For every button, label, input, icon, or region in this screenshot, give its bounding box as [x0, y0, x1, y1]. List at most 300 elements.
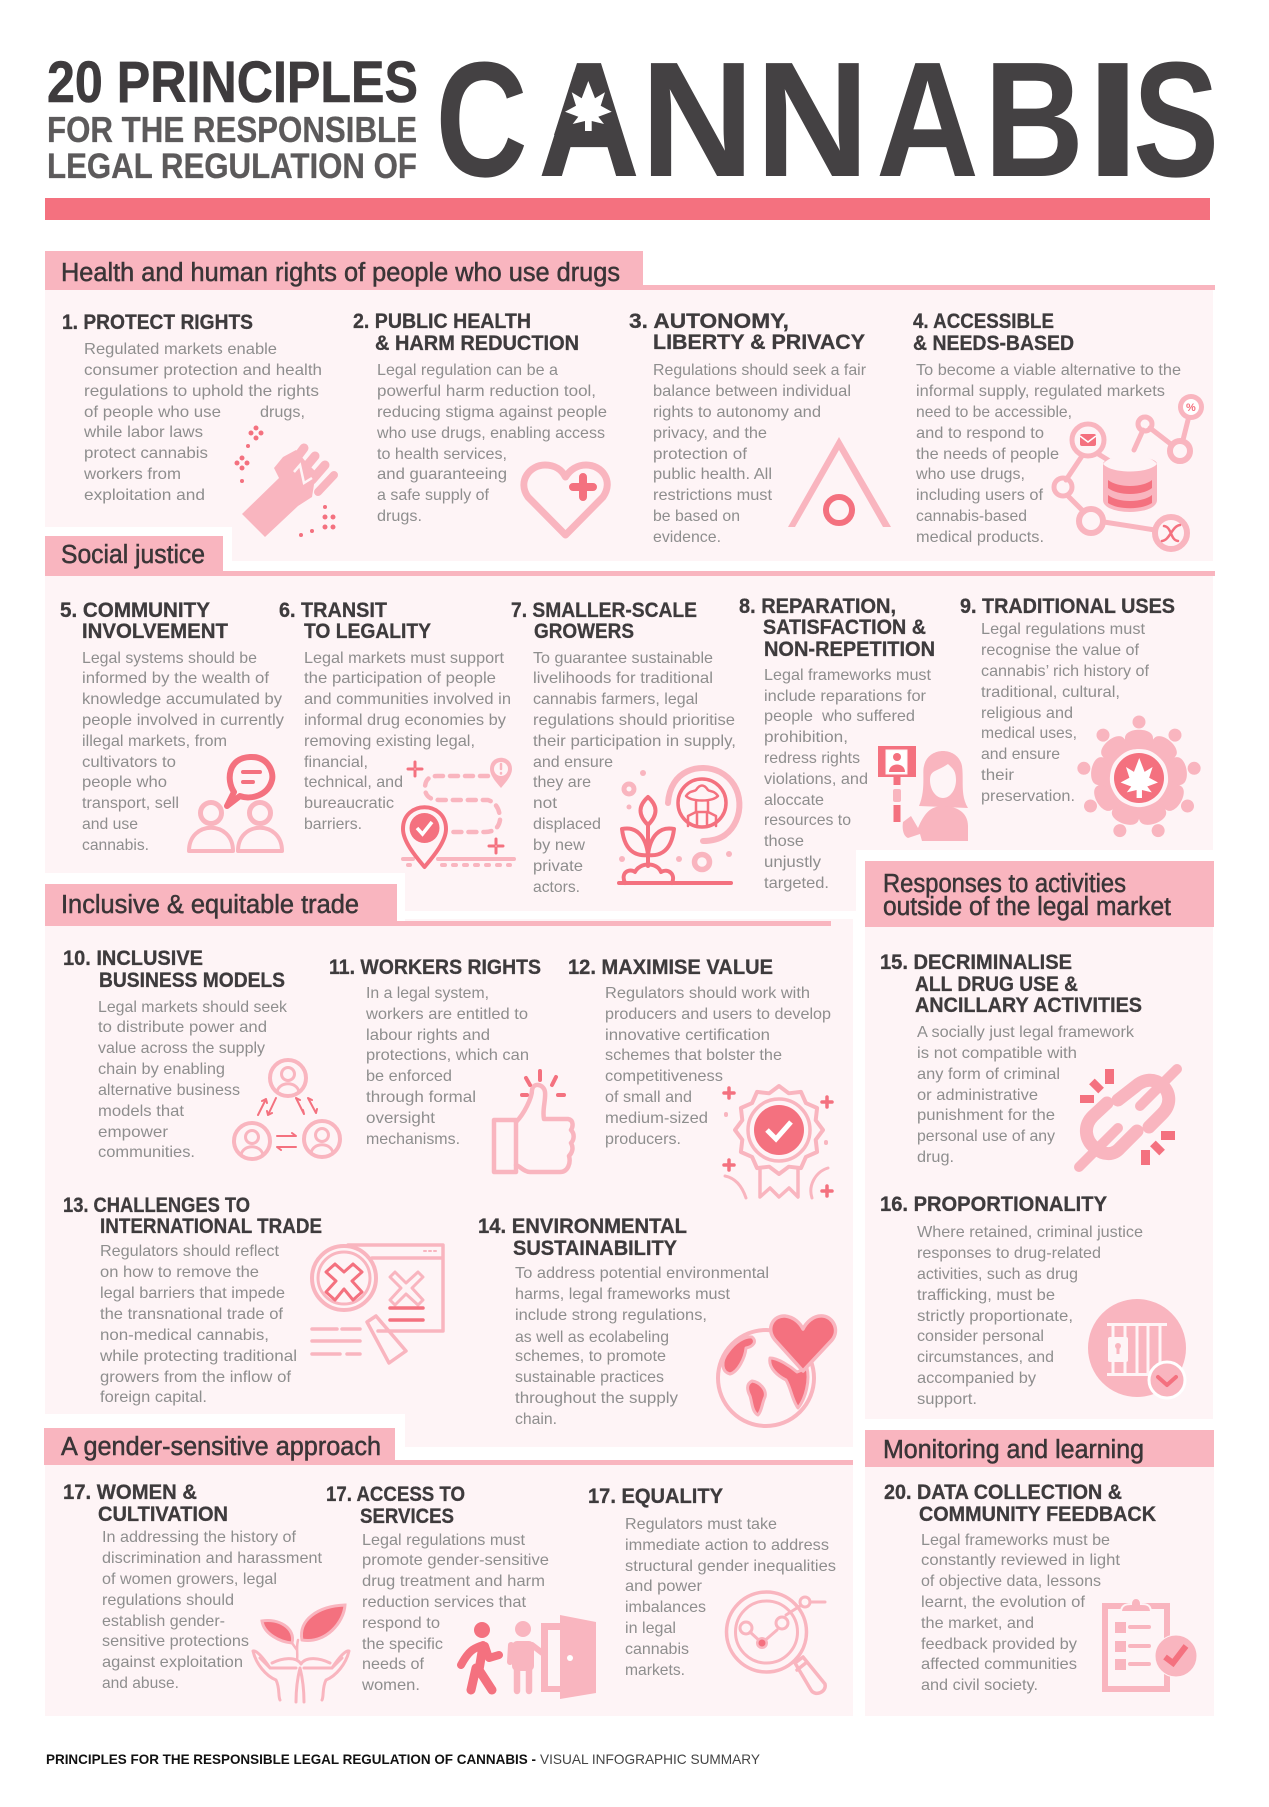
body text — [915, 362, 1181, 546]
body text: drugs. — [377, 508, 422, 525]
body text: markets. — [625, 1662, 685, 1679]
body text: Legal frameworks must — [764, 667, 932, 684]
principle 4: accessible and needs-based — [913, 310, 1204, 549]
body text: actors. — [533, 879, 580, 896]
body text: imbalances — [625, 1599, 706, 1616]
body text: and ensure — [533, 754, 613, 771]
body text: establish gender- — [102, 1613, 225, 1630]
body text: To guarantee sustainable — [533, 650, 713, 667]
body text: unjustly — [764, 854, 821, 871]
body text: alternative business — [98, 1082, 240, 1099]
title underline bar — [45, 198, 1210, 220]
body text: privacy, and the — [653, 425, 767, 442]
heading — [63, 947, 285, 992]
icon: clipboard with check — [1102, 1598, 1197, 1692]
body text: Regulated markets enable — [84, 341, 277, 358]
heading: 12. MAXIMISE VALUE — [568, 956, 773, 979]
icon: thumbs up — [494, 1071, 574, 1172]
body text: of objective data, lessons — [921, 1573, 1101, 1590]
section heading: monitoring and learning: Monitoring and learning — [883, 1436, 1144, 1464]
body text — [365, 985, 529, 1148]
heading: SATISFACTION & — [763, 616, 926, 639]
heading: SUSTAINABILITY — [513, 1237, 677, 1260]
body text: workers from — [83, 466, 181, 483]
body text: activities, such as drug — [917, 1266, 1078, 1283]
body text — [99, 1243, 297, 1406]
body text: A socially just legal framework — [917, 1024, 1135, 1041]
body text: and power — [625, 1578, 703, 1595]
body text: traditional, cultural, — [981, 684, 1120, 701]
title: cannabis: A — [876, 28, 979, 211]
body text: who use drugs, — [915, 466, 1025, 483]
body text: cannabis — [625, 1641, 689, 1658]
heading: & NEEDS-BASED — [913, 332, 1074, 355]
icon: three people exchanging — [234, 1060, 340, 1159]
title: cannabis: I — [1085, 28, 1141, 211]
heading: 9. TRADITIONAL USES — [960, 595, 1175, 618]
body text: Regulations should seek a fair — [653, 362, 867, 379]
title: cannabis: N — [755, 28, 869, 211]
body text: innovative certification — [605, 1027, 770, 1044]
body text: public health. All — [653, 466, 772, 483]
body text: while labor laws — [83, 424, 203, 441]
principle 5: community involvement — [60, 599, 284, 854]
body text: people who suffered — [764, 708, 915, 725]
body text: rights to autonomy and — [653, 404, 821, 421]
heading: 8. REPARATION, — [739, 595, 896, 618]
body text: removing existing legal, — [304, 733, 475, 750]
heading — [880, 951, 1142, 1017]
body text: powerful harm reduction tool, — [377, 383, 596, 400]
body text: Regulators should work with — [605, 985, 810, 1002]
body text: and abuse. — [102, 1675, 179, 1692]
icon: hands holding a sprout — [253, 1605, 349, 1702]
heading: CULTIVATION — [98, 1503, 228, 1526]
body text: Legal regulations must — [981, 621, 1146, 638]
body text: In addressing the history of — [102, 1529, 297, 1546]
body text: those — [764, 833, 804, 850]
body text: religious and — [981, 705, 1073, 722]
body text: protect cannabis — [84, 445, 208, 462]
icon: globe with heart — [718, 1316, 835, 1426]
body text: and use — [82, 816, 138, 833]
title: cannabis: B — [984, 28, 1084, 211]
body text: drug. — [917, 1149, 954, 1166]
panel: health and human rights — [45, 251, 1215, 561]
body text — [83, 341, 322, 504]
principle 9: traditional uses — [960, 595, 1203, 842]
body text: transport, sell — [82, 795, 179, 812]
body text: financial, — [304, 754, 368, 771]
body text: exploitation and — [84, 487, 205, 504]
body text: consumer protection and health — [84, 362, 322, 379]
heading: 14. ENVIRONMENTAL — [478, 1215, 687, 1238]
body text: cannabis-based — [916, 508, 1027, 525]
principle 7: smaller-scale growers — [511, 599, 739, 896]
heading: INTERNATIONAL TRADE — [100, 1215, 322, 1238]
principle 20: data collection and community feedback — [884, 1481, 1197, 1694]
body text: barriers. — [304, 816, 362, 833]
heading — [478, 1215, 687, 1260]
section heading: social justice: Social justice — [61, 541, 205, 569]
body text: on how to remove the — [100, 1264, 259, 1281]
body text: need to be accessible, — [916, 404, 1072, 421]
body text: people involved in currently — [82, 712, 284, 729]
icon: raised fist — [234, 426, 336, 537]
heading: 16. PROPORTIONALITY — [880, 1193, 1107, 1216]
body text: against exploitation — [102, 1654, 243, 1671]
heading: 15. DECRIMINALISE — [880, 951, 1072, 974]
heading: 11. WORKERS RIGHTS — [329, 956, 541, 979]
principle 19: equality — [588, 1485, 836, 1693]
body text — [376, 362, 607, 525]
heading — [913, 310, 1074, 355]
icon: triangle with ring — [788, 437, 891, 527]
body text: respond to — [362, 1615, 440, 1632]
body text: producers and users to develop — [605, 1006, 831, 1023]
body text — [102, 1529, 323, 1692]
section heading: monitoring and learning — [865, 1430, 1214, 1467]
body text: drug treatment and harm — [362, 1573, 545, 1590]
icon: heart with cross — [524, 465, 607, 535]
section heading: gender-sensitive approach: A gender-sensitive approach — [61, 1433, 381, 1461]
body text: livelihoods for traditional — [533, 670, 713, 687]
heading — [884, 1481, 1156, 1526]
title: 20 principles: 20 PRINCIPLES — [47, 50, 418, 115]
body text: To become a viable alternative to the — [916, 362, 1181, 379]
panel: responses to activities outside the legal market — [865, 861, 1214, 1419]
body text: throughout the supply — [515, 1390, 678, 1407]
section heading: inclusive and equitable trade — [45, 884, 831, 926]
body text: needs of — [362, 1656, 425, 1673]
body text: learnt, the evolution of — [921, 1594, 1086, 1611]
principle 8: reparation, satisfaction and non-repetition — [739, 595, 968, 892]
body text: and ensure — [981, 746, 1060, 763]
body text: and guaranteeing — [377, 466, 507, 483]
body text: chain. — [515, 1411, 557, 1428]
heading: 2. PUBLIC HEALTH — [353, 310, 531, 333]
body text: cannabis. — [82, 837, 149, 854]
body text: structural gender inequalities — [625, 1558, 836, 1575]
body text: the participation of people — [304, 670, 496, 687]
body text — [764, 667, 932, 892]
body text — [82, 650, 284, 854]
body text: constantly reviewed in light — [921, 1552, 1121, 1569]
body text: protection of — [653, 446, 748, 463]
body text: informal drug economies by — [304, 712, 506, 729]
principle 12: maximise value — [568, 956, 832, 1198]
body text — [917, 1224, 1143, 1408]
body text: regulations should — [102, 1592, 234, 1609]
heading: 13. CHALLENGES TO — [63, 1194, 250, 1217]
body text: non-medical cannabis, — [100, 1327, 269, 1344]
body text — [917, 1024, 1135, 1166]
body text: strictly proportionate, — [917, 1308, 1073, 1325]
body text: is not compatible with — [917, 1045, 1077, 1062]
body text: schemes that bolster the — [605, 1047, 782, 1064]
body text: balance between individual — [653, 383, 851, 400]
body text — [981, 621, 1150, 805]
body text: sustainable practices — [515, 1369, 664, 1386]
heading: COMMUNITY FEEDBACK — [919, 1503, 1156, 1526]
body text: illegal markets, from — [82, 733, 227, 750]
body text: redress rights — [764, 750, 860, 767]
section heading: social justice — [45, 536, 1215, 576]
icon: magnifier over a window with crosses — [312, 1245, 443, 1363]
body text: knowledge accumulated by — [82, 691, 282, 708]
body text: of small and — [605, 1089, 692, 1106]
body text: evidence. — [653, 529, 721, 546]
body text: circumstances, and — [917, 1349, 1054, 1366]
icon: cannabis leaf inside the letter A — [554, 72, 622, 135]
section heading: responses — [865, 861, 1214, 927]
heading: 4. ACCESSIBLE — [913, 310, 1054, 333]
body text: sensitive protections — [102, 1633, 249, 1650]
title: cannabis: A — [538, 28, 640, 211]
body text: while protecting traditional — [99, 1348, 297, 1365]
body text: oversight — [366, 1110, 436, 1127]
body text: informal supply, regulated markets — [916, 383, 1165, 400]
body text: Legal markets should seek — [98, 999, 288, 1016]
icon: community circle around a leaf — [1075, 716, 1203, 842]
principle 1: protect rights — [62, 311, 336, 537]
body text: producers. — [605, 1131, 681, 1148]
body text: they are — [533, 774, 591, 791]
body text: include reparations for — [764, 688, 927, 705]
heading: 10. INCLUSIVE — [63, 947, 203, 970]
heading: 17. EQUALITY — [588, 1485, 723, 1508]
body text: regulations should prioritise — [533, 712, 735, 729]
icon: broken chain — [1079, 1069, 1177, 1167]
heading: LIBERTY & PRIVACY — [653, 331, 865, 354]
heading — [511, 599, 697, 643]
body text: communities. — [98, 1144, 195, 1161]
body text: and communities involved in — [304, 691, 511, 708]
icon: data network: % — [1186, 402, 1196, 414]
footer caption: VISUAL INFOGRAPHIC SUMMARY — [540, 1751, 761, 1767]
body text: value across the supply — [98, 1040, 265, 1057]
principle 17: women and cultivation — [63, 1481, 349, 1702]
heading — [353, 310, 579, 355]
body text: discrimination and harassment — [102, 1550, 323, 1567]
principle 2: public health and harm reduction — [353, 310, 607, 535]
body text: as well as ecolabeling — [515, 1329, 669, 1346]
panel: inclusive and equitable trade — [45, 884, 853, 1447]
body text: feedback provided by — [921, 1636, 1077, 1653]
body text: accompanied by — [917, 1370, 1036, 1387]
heading: 17. ACCESS TO — [326, 1483, 465, 1506]
body text: resources to — [764, 812, 851, 829]
principle 16: proportionality — [880, 1193, 1186, 1408]
body text: through formal — [366, 1089, 476, 1106]
panel: social justice — [45, 536, 1215, 911]
body text: reduction services that — [362, 1594, 527, 1611]
body text: bureaucratic — [304, 795, 394, 812]
section heading: responses: Responses to activities — [883, 870, 1126, 898]
body text — [605, 985, 831, 1148]
heading: 20. DATA COLLECTION & — [884, 1481, 1122, 1504]
section heading: inclusive and equitable trade: Inclusive & equitable trade — [61, 891, 359, 919]
body text: Legal regulations must — [362, 1532, 526, 1549]
body text: workers are entitled to — [365, 1006, 528, 1023]
body text — [98, 999, 288, 1161]
body text — [921, 1532, 1121, 1694]
body text: their — [981, 767, 1015, 784]
icon: quality badge — [724, 1086, 832, 1198]
heading — [326, 1483, 465, 1528]
body text: violations, and — [764, 771, 868, 788]
body text: by new — [533, 837, 585, 854]
body text: Legal systems should be — [82, 650, 257, 667]
body text: including users of — [916, 487, 1044, 504]
body text: not — [533, 795, 558, 812]
heading: 5. COMMUNITY — [60, 599, 210, 622]
body text: personal use of any — [917, 1128, 1055, 1145]
heading: 6. TRANSIT — [279, 599, 387, 622]
icon: prison bars with chevron — [1088, 1299, 1186, 1398]
body text: growers from the inflow of — [100, 1369, 292, 1386]
heading: ALL DRUG USE & — [915, 973, 1078, 996]
heading: TO LEGALITY — [304, 620, 431, 643]
subtitle line 1: FOR THE RESPONSIBLE — [47, 109, 417, 150]
body text: displaced — [533, 816, 601, 833]
body text: and to respond to — [916, 425, 1044, 442]
body text — [653, 362, 867, 546]
body text: to distribute power and — [98, 1019, 267, 1036]
body text: the market, and — [921, 1615, 1034, 1632]
body text: Legal regulation can be a — [377, 362, 558, 379]
heading — [629, 310, 865, 354]
heading — [739, 595, 935, 661]
body text: aloccate — [764, 792, 824, 809]
icon: two people walking to a door — [461, 1615, 596, 1699]
heading: & HARM REDUCTION — [375, 332, 579, 355]
heading: ANCILLARY ACTIVITIES — [915, 994, 1142, 1017]
title: cannabis: N — [640, 28, 754, 211]
body text: affected communities — [921, 1656, 1077, 1673]
body text — [625, 1516, 836, 1679]
icon: woman holding a portrait sign — [878, 746, 968, 841]
body text: preservation. — [981, 788, 1075, 805]
heading — [63, 1194, 322, 1238]
body text: support. — [917, 1391, 977, 1408]
body text: the transnational trade of — [100, 1306, 284, 1323]
heading: INVOLVEMENT — [82, 620, 228, 643]
icon: data network — [1054, 394, 1204, 549]
body text: regulations to uphold the rights — [84, 383, 319, 400]
body text: and civil society. — [921, 1677, 1038, 1694]
section heading: health and human rights: Health and human rights of people who use drugs — [61, 259, 620, 287]
body text — [533, 650, 736, 896]
body text: cannabis’ rich history of — [981, 663, 1150, 680]
subtitle line 2: LEGAL REGULATION OF — [47, 147, 417, 186]
body text: of women growers, legal — [102, 1571, 277, 1588]
body text: medical products. — [916, 529, 1044, 546]
heading — [63, 1481, 228, 1526]
body text: to health services, — [377, 446, 507, 463]
heading: 7. SMALLER-SCALE — [511, 599, 697, 622]
icon: route with map pins — [403, 758, 514, 867]
principle 3: autonomy, liberty and privacy — [629, 310, 891, 546]
body text: in legal — [625, 1620, 676, 1637]
heading: NON-REPETITION — [764, 638, 935, 661]
heading: 17. WOMEN & — [63, 1481, 197, 1504]
body text: reducing stigma against people — [377, 404, 607, 421]
body text: immediate action to address — [625, 1537, 829, 1554]
title: cannabis: C — [436, 28, 528, 211]
body text: private — [533, 858, 583, 875]
section heading: health and human rights — [45, 251, 1215, 290]
panel: a gender-sensitive approach — [44, 1428, 853, 1716]
panel: monitoring and learning — [865, 1430, 1214, 1716]
icon: magnifier with line chart — [726, 1592, 825, 1693]
body text: informed by the wealth of — [82, 670, 270, 687]
body text: drugs, — [260, 404, 305, 421]
body text: promote gender-sensitive — [362, 1552, 549, 1569]
title block — [45, 28, 1219, 220]
body text: protections, which can — [366, 1047, 529, 1064]
body text — [361, 1532, 549, 1694]
principle 11: workers rights — [329, 956, 574, 1172]
body text: cannabis farmers, legal — [533, 691, 698, 708]
body text: trafficking, must be — [917, 1287, 1055, 1304]
principle 15: decriminalise — [880, 951, 1177, 1167]
body text: foreign capital. — [100, 1389, 207, 1406]
body text: responses to drug-related — [917, 1245, 1101, 1262]
body text: In a legal system, — [366, 985, 489, 1002]
body text: legal barriers that impede — [100, 1285, 285, 1302]
body text: harms, legal frameworks must — [515, 1286, 731, 1303]
body text: technical, and — [304, 774, 403, 791]
section heading: responses: outside of the legal market — [883, 893, 1171, 921]
body text: Legal markets must support — [304, 650, 505, 667]
body text: labour rights and — [366, 1027, 490, 1044]
body text: Regulators must take — [625, 1516, 777, 1533]
body text: prohibition, — [764, 729, 848, 746]
body text: models that — [98, 1103, 185, 1120]
heading: SERVICES — [360, 1505, 454, 1528]
principle 18: access to services — [326, 1483, 596, 1699]
body text: any form of criminal — [917, 1066, 1060, 1083]
principle 10: inclusive business models — [63, 947, 340, 1161]
heading: 1. PROTECT RIGHTS — [62, 311, 253, 334]
heading: GROWERS — [534, 620, 634, 643]
body text — [515, 1265, 769, 1428]
body text: recognise the value of — [981, 642, 1140, 659]
body text: be based on — [653, 508, 740, 525]
icon: plant and farmer — [619, 768, 739, 883]
section heading: gender-sensitive approach — [44, 1428, 853, 1465]
body text: their participation in supply, — [533, 733, 736, 750]
principle 6: transit to legality — [279, 599, 514, 867]
body text: competitiveness — [605, 1068, 723, 1085]
body text: the needs of people — [916, 446, 1059, 463]
body text: women. — [361, 1677, 420, 1694]
body text: chain by enabling — [98, 1061, 225, 1078]
heading — [60, 599, 228, 643]
body text: medium-sized — [605, 1110, 708, 1127]
heading — [279, 599, 431, 643]
body text: the specific — [362, 1636, 443, 1653]
body text: mechanisms. — [366, 1131, 460, 1148]
body text: or administrative — [917, 1087, 1038, 1104]
principle 14: environmental sustainability — [478, 1215, 835, 1428]
body text: restrictions must — [653, 487, 773, 504]
body text: schemes, to promote — [515, 1348, 666, 1365]
body text: consider personal — [917, 1328, 1044, 1345]
body text: be enforced — [366, 1068, 452, 1085]
body text: Regulators should reflect — [100, 1243, 280, 1260]
